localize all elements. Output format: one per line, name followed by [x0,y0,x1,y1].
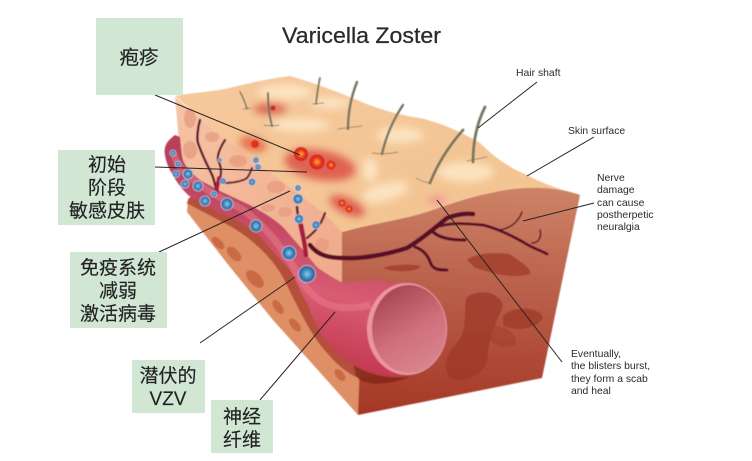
label: initial stage sensitive skin: 敏感皮肤 [69,200,145,222]
caption: blisters burst [571,349,650,397]
label: latent VZV: 潜伏的 [139,365,197,387]
caption: nerve damage: postherpetic [597,210,654,221]
caption: blisters burst: the blisters burst, [571,361,650,372]
label: initial stage sensitive skin: 阶段 [88,177,126,199]
label: nerve fibre: 神经 [223,406,261,428]
label: blisters [96,18,183,95]
nerve branches [197,120,547,270]
label: initial stage sensitive skin [58,150,155,225]
caption: nerve damage: neuralgia [597,222,640,233]
caption: blisters burst: they form a scab [571,374,648,385]
caption: nerve damage: can cause [597,198,645,209]
lower-left dermis face [187,198,360,415]
strip tissue patches [183,108,329,252]
nerve fibre tube [165,135,408,377]
nerve trunks [216,178,306,255]
label: weakened immune system [70,252,167,328]
blisters [251,106,352,212]
caption: nerve damage: damage [597,185,635,196]
caption: nerve damage: Nerve [597,173,625,184]
pale highlights on skin [257,84,493,207]
label: weakened immune system: 减弱 [99,280,137,302]
label: initial stage sensitive skin: 初始 [88,154,126,176]
hairs [240,78,487,183]
skin top surface [175,76,580,232]
skin block illustration [165,76,580,415]
caption: nerve damage [597,173,654,233]
label: weakened immune system: 免疫系统 [80,257,156,279]
title: Varicella Zoster [282,23,441,48]
label: weakened immune system: 激活病毒 [80,303,156,325]
leader lines [155,82,594,400]
tube cut end rim [367,283,447,375]
red rash patches [238,104,447,221]
caption: skin surface: Skin surface [568,126,625,137]
pink epidermis strip on left face [175,97,342,290]
tube highlight [174,155,370,308]
caption: blisters burst: Eventually, [571,349,621,360]
dark tissue patches on right face [383,253,543,380]
caption: blisters burst: and heal [571,386,611,397]
label: nerve fibre: 纤维 [223,429,261,451]
label: latent VZV: VZV [150,389,187,410]
shadow under tube [352,358,410,384]
label: latent VZV [132,360,205,413]
label: blisters: 疱疹 [119,47,159,69]
lower-left patches [210,235,348,383]
virus particles [170,150,320,282]
tube lumen [372,285,446,373]
label: nerve fibre [211,400,273,453]
dark band under tube [190,197,362,372]
right dermis face [342,188,580,415]
caption: hair shaft: Hair shaft [516,68,561,79]
